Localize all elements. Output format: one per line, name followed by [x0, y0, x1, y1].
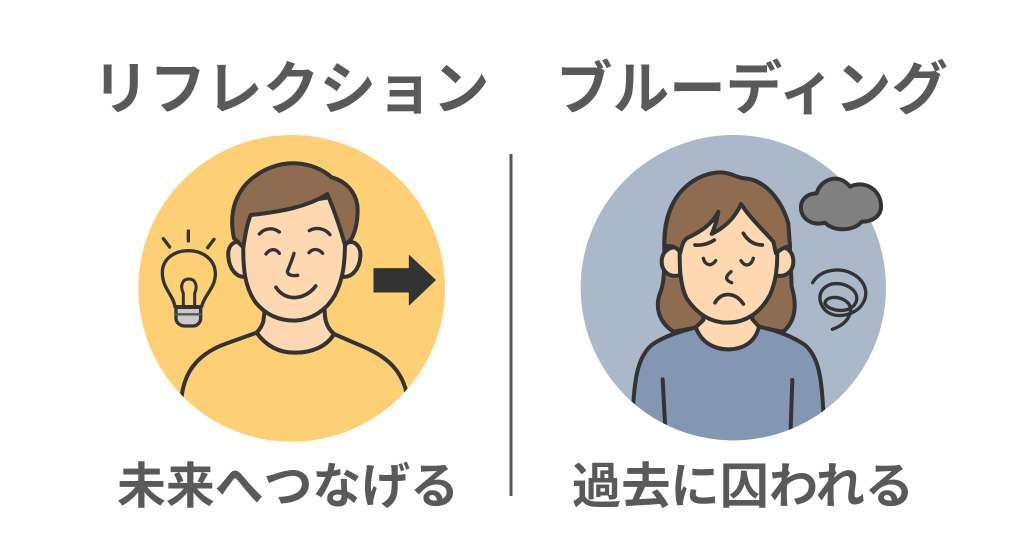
caption: brooding: 過去に囚われる [572, 460, 914, 514]
nose [727, 272, 732, 283]
eyebrows [695, 233, 762, 245]
frown [715, 295, 743, 304]
title: reflection: リフレクション [92, 57, 490, 122]
face [680, 203, 777, 323]
man figure [182, 163, 407, 450]
panel: reflection illustration [138, 135, 445, 450]
neck [257, 307, 334, 353]
caption: reflection: 未来へつなげる [117, 460, 459, 514]
smile [276, 286, 316, 298]
icon: swirl [813, 270, 866, 329]
icon: light bulb [162, 231, 215, 326]
ears [662, 247, 680, 276]
blue-grey circle background [581, 135, 886, 440]
shirt [633, 327, 823, 450]
panel: brooding illustration [581, 135, 886, 450]
fringe [664, 172, 790, 253]
light rays [163, 231, 214, 248]
title: brooding: ブルーディング [556, 57, 948, 122]
sleeve lines [663, 379, 792, 428]
woman figure [633, 172, 823, 450]
yellow circle background [138, 135, 445, 442]
closed eyes [703, 258, 753, 265]
hair [232, 163, 358, 247]
neck [696, 313, 759, 349]
eyebrows [259, 229, 330, 235]
center divider [510, 154, 512, 496]
shirt [182, 333, 407, 450]
face [243, 197, 345, 321]
long hair [658, 172, 795, 332]
icon: arrow right [374, 256, 435, 305]
eyes [266, 249, 323, 254]
ears [228, 242, 247, 277]
icon: dark cloud [801, 179, 881, 229]
nose [287, 253, 298, 276]
